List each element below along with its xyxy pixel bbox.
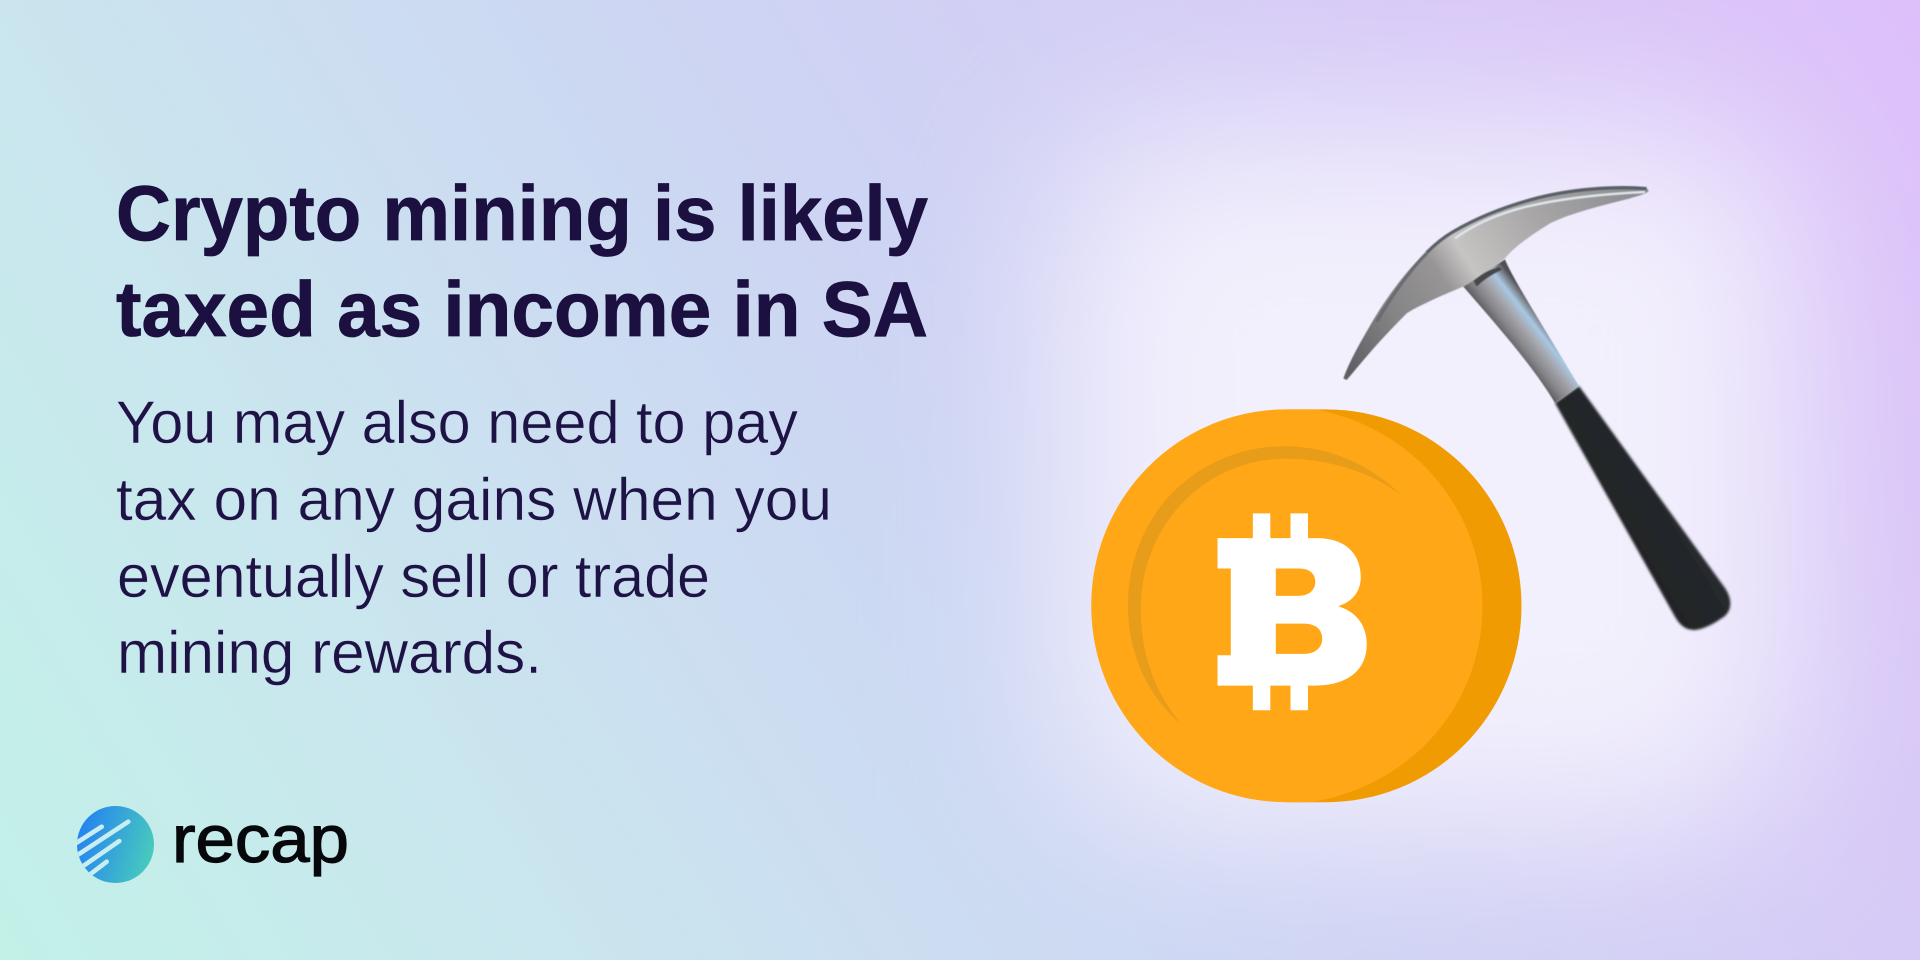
pickaxe shaft — [1463, 259, 1579, 403]
icon: bitcoin coin — [1091, 409, 1521, 802]
illustration: bitcoin coin and pickaxe — [1091, 187, 1730, 802]
coin face — [1091, 409, 1482, 802]
body text — [116, 389, 832, 686]
logo wordmark: recap — [172, 802, 349, 877]
pickaxe head top edge — [1427, 188, 1647, 253]
pickaxe grip — [1555, 386, 1730, 630]
icon: pickaxe — [1343, 187, 1730, 630]
coin rim — [1287, 409, 1521, 802]
body text: eventually sell or trade — [117, 543, 710, 610]
body text: You may also need to pay — [116, 389, 798, 456]
icon: recap logo mark — [70, 806, 154, 883]
title: taxed as income in SA — [116, 265, 928, 353]
recap logo — [70, 802, 349, 883]
coin inner arc — [1128, 446, 1402, 725]
pickaxe head — [1343, 187, 1648, 380]
pickaxe collar — [1473, 267, 1502, 287]
body text: mining rewards. — [117, 619, 542, 686]
title: Crypto mining is likely — [116, 169, 928, 257]
bitcoin symbol — [1217, 513, 1367, 710]
body text: tax on any gains when you — [116, 466, 832, 533]
title — [116, 169, 928, 353]
